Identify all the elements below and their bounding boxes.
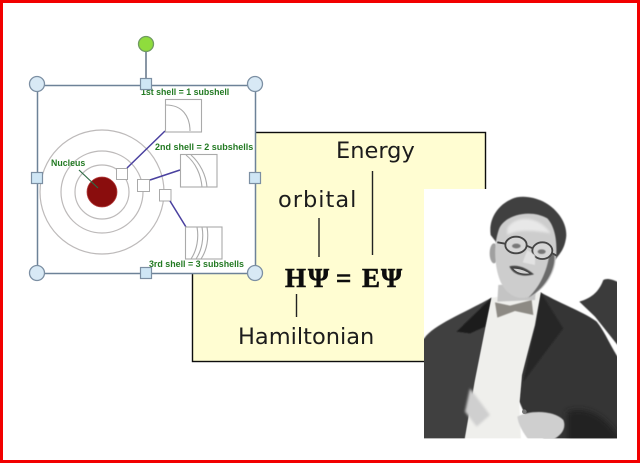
equation: Ψ <box>381 263 402 293</box>
shell 3 box <box>186 227 222 259</box>
connector: Hamiltonian <box>296 294 298 317</box>
jacket left <box>424 297 492 438</box>
round corner handles <box>30 76 262 280</box>
ear <box>490 243 498 263</box>
connector lines <box>127 131 186 227</box>
eyes <box>512 244 521 248</box>
face <box>495 214 556 298</box>
nose <box>523 250 535 265</box>
label: orbital: orbital <box>278 187 357 213</box>
selection frame <box>38 86 256 274</box>
equation: = <box>336 263 351 293</box>
equation: E <box>362 263 380 293</box>
nucleus <box>87 177 117 207</box>
bow tie <box>495 300 533 318</box>
shell labels: 3rd shell = 3 subshells <box>149 259 244 269</box>
shirt fold <box>465 388 490 427</box>
panel: selected atom diagram <box>30 36 262 280</box>
shell labels: 2nd shell = 2 subshells <box>155 142 253 152</box>
label: Hamiltonian: Hamiltonian <box>238 324 374 350</box>
panel: Schrodinger equation <box>192 132 486 362</box>
label: Energy: Energy <box>336 138 415 164</box>
connector: Energy <box>372 171 374 255</box>
rotate handle <box>138 36 154 52</box>
shell labels <box>141 87 253 269</box>
connector: orbital <box>318 218 320 257</box>
smile <box>509 266 534 276</box>
cheek shadow <box>528 253 554 298</box>
rotate stem <box>145 50 147 80</box>
square edge handles <box>32 78 260 278</box>
jacket lower shading <box>563 408 617 438</box>
atom rings <box>40 130 164 254</box>
jacket lapels <box>457 298 492 333</box>
teeth <box>513 269 529 274</box>
glasses <box>497 237 557 259</box>
shell 1 box <box>166 100 202 132</box>
neck <box>497 284 536 302</box>
photo: Erwin Schrodinger <box>424 189 617 438</box>
small sample squares <box>116 168 171 201</box>
nucleus pointer <box>79 170 98 188</box>
background tree <box>578 278 617 346</box>
shell labels: 1st shell = 1 subshell <box>141 87 229 97</box>
equation: H <box>285 263 306 293</box>
equation: Ψ <box>308 263 329 293</box>
forehead highlight <box>507 219 551 235</box>
shirt <box>464 292 542 438</box>
hair <box>490 197 566 260</box>
hand <box>517 412 564 442</box>
jacket right <box>519 292 617 438</box>
shell 2 box <box>180 154 217 187</box>
label: nucleus: Nucleus <box>51 158 85 168</box>
